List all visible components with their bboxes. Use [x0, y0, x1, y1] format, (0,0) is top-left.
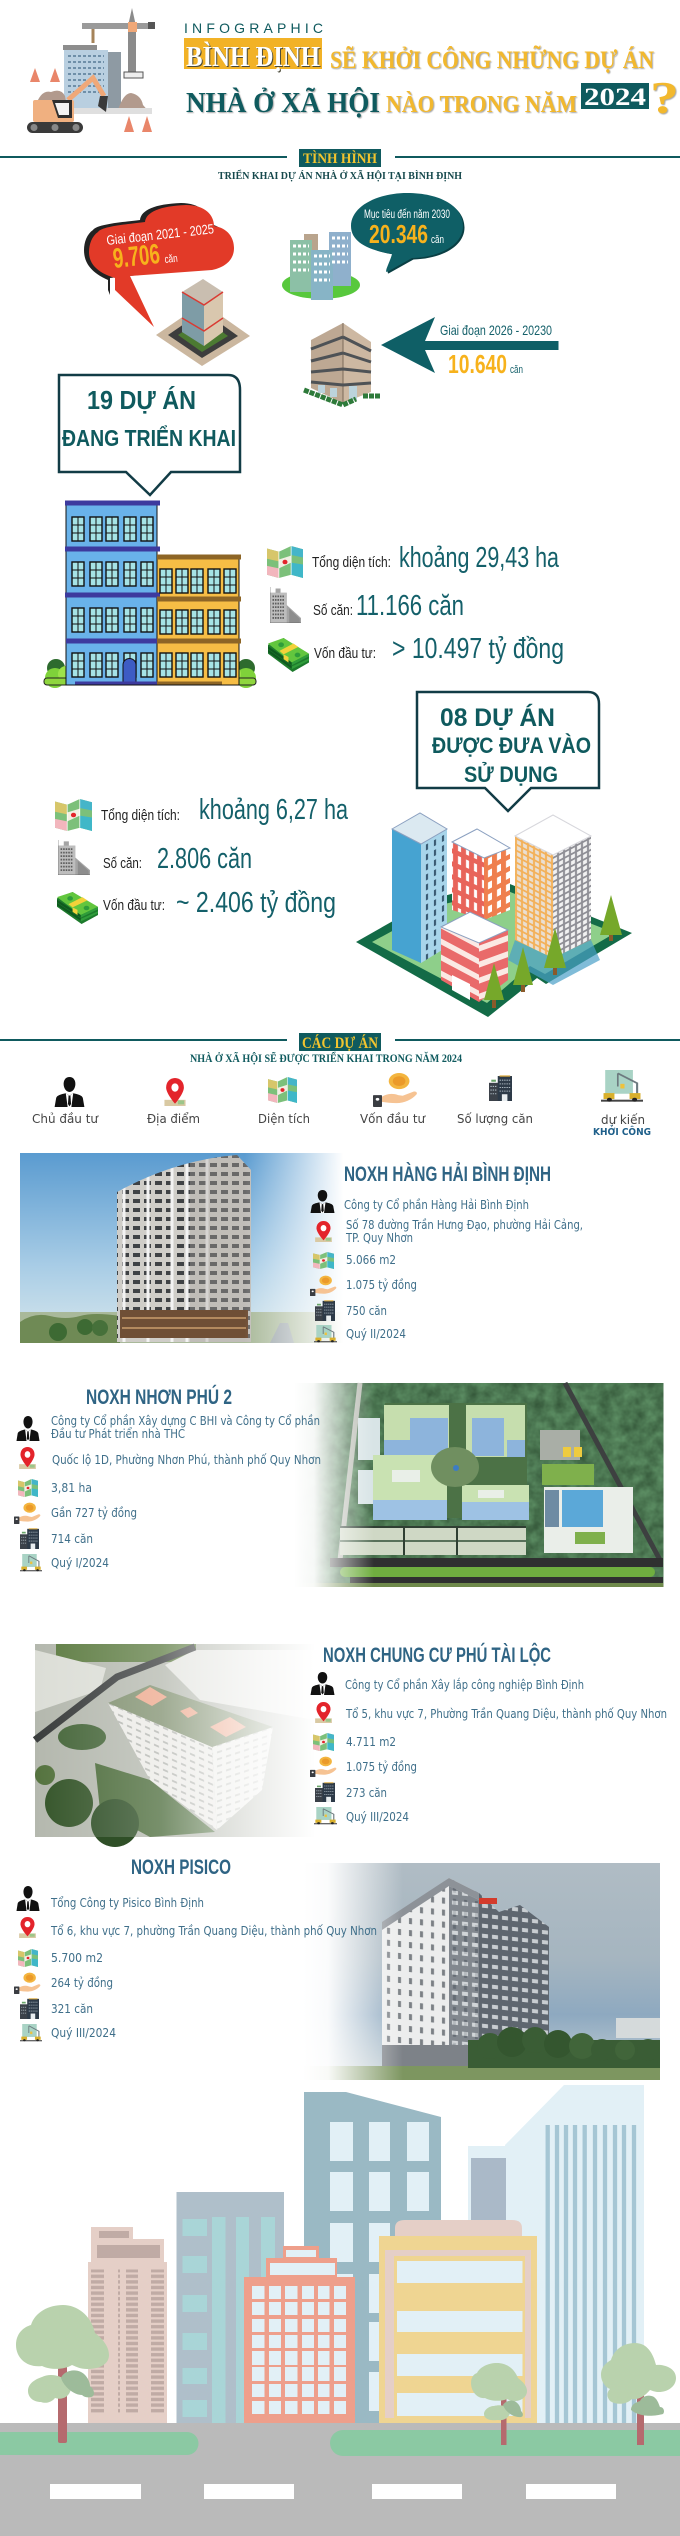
units row	[20, 1529, 93, 1549]
callout: 08 projects in use	[417, 692, 599, 811]
title highlight box: BÌNH ĐỊNH: BÌNH ĐỊNH	[186, 40, 320, 73]
investor row	[16, 1413, 320, 1441]
callout: target by 2030: 20.346	[369, 219, 428, 249]
area row: 4.711 m2	[346, 1734, 396, 1749]
callout: 2021-2025 target: căn	[164, 253, 178, 266]
units row: 750 căn	[346, 1303, 387, 1318]
stat: units: 11.166 căn	[356, 590, 464, 622]
start row	[314, 1807, 409, 1824]
location row: TP. Quy Nhơn	[345, 1230, 413, 1245]
title line 2: NHÀ Ở XÃ HỘI: NHÀ Ở XÃ HỘI	[186, 86, 380, 119]
project info: Pisico	[14, 1856, 377, 2041]
units row: 714 căn	[51, 1531, 93, 1546]
project info: Phú Tài Lộc	[310, 1643, 667, 1824]
location row	[19, 1447, 321, 1469]
project name: NOXH NHƠN PHÚ 2	[86, 1385, 232, 1409]
capital row: 1.075 tỷ đồng	[346, 1277, 417, 1292]
header illustration: construction site	[27, 8, 155, 133]
legend item: expected start: KHỞI CÔNG	[593, 1124, 651, 1138]
stats: 19 projects	[267, 542, 564, 672]
stat: units: 2.806 căn	[157, 843, 252, 875]
capital row: 264 tỷ đồng	[51, 1975, 113, 1990]
building: coral block	[244, 2246, 355, 2423]
stat: units	[313, 590, 464, 622]
stat: units: Số căn:	[313, 602, 353, 619]
kicker: INFOGRAPHIC: INFOGRAPHIC	[184, 20, 323, 36]
stat: investment: ~ 2.406 tỷ đồng	[176, 887, 336, 919]
area row	[313, 1733, 396, 1751]
area row: 5.066 m2	[346, 1252, 396, 1267]
label: 2026-2030 figures: 10.640	[448, 349, 507, 379]
legend item: area: Diện tích	[258, 1112, 310, 1126]
stat: total area: khoảng 29,43 ha	[399, 542, 560, 574]
callout: 19 projects under way: 19 DỰ ÁN	[87, 385, 196, 415]
project info: Hàng Hải Bình Định	[310, 1163, 583, 1342]
project name: NOXH PISICO	[131, 1856, 231, 1879]
label: 2026-2030 figures: Giai đoạn 2026 - 20230	[440, 322, 552, 338]
label: 2026-2030 figures	[440, 322, 552, 379]
units row: 273 căn	[346, 1785, 387, 1800]
project photo: Hàng Hải tower	[20, 1150, 350, 1345]
stat: total area: khoảng 6,27 ha	[199, 794, 349, 826]
callout: 2021-2025 target	[84, 203, 234, 327]
legend: icon key	[32, 1070, 651, 1138]
location row: Tổ 6, khu vực 7, phường Trần Quang Diệu, thành phố Quy Nhơn	[50, 1923, 377, 1938]
tree: right	[601, 2343, 676, 2445]
green verge: left	[0, 2432, 198, 2455]
investor row: Đầu tư Phát triển nhà THC	[51, 1426, 185, 1441]
project photo: Nhơn Phú 2 aerial	[294, 1382, 664, 1588]
callout: 19 projects under way	[59, 375, 240, 495]
icon: isometric office tower	[156, 279, 250, 366]
callout: 08 projects in use: ĐƯỢC ĐƯA VÀO	[432, 733, 591, 758]
legend item: expected start	[593, 1070, 651, 1138]
investor row: Công ty Cổ phần Xây dựng C BHI và Công ty Cổ phần	[51, 1413, 320, 1428]
legend item: investor	[32, 1077, 99, 1126]
road markings	[50, 2484, 616, 2499]
start row: Quý III/2024	[346, 1809, 409, 1824]
legend item: capital	[360, 1073, 426, 1126]
icon: money	[268, 638, 309, 672]
year badge: 2024	[584, 84, 647, 111]
building: pink tower	[88, 2227, 167, 2423]
units row: 321 căn	[51, 2001, 93, 2016]
callout: 08 projects in use: SỬ DỤNG	[464, 762, 558, 787]
start row: Quý III/2024	[51, 2025, 116, 2040]
building: pale skyscraper	[468, 2085, 644, 2423]
location row	[19, 1917, 377, 1938]
location row	[315, 1702, 667, 1723]
area row	[18, 1479, 92, 1497]
callout: target by 2030: căn	[431, 234, 444, 246]
start row	[314, 1325, 406, 1342]
capital row	[14, 1973, 113, 1994]
area row: 5.700 m2	[51, 1950, 103, 1965]
investor row	[16, 1886, 204, 1911]
callout: 2021-2025 target: Giai đoạn 2021 - 2025	[106, 221, 215, 248]
location row: Quốc lộ 1D, Phường Nhơn Phú, thành phố Quy Nhơn	[52, 1452, 321, 1467]
green verge: right	[330, 2430, 680, 2456]
section heading: TÌNH HÌNH: TÌNH HÌNH	[303, 150, 377, 167]
illustration: blue and yellow apartment blocks	[44, 503, 256, 688]
tree: middle	[471, 2363, 527, 2445]
tree: left	[16, 2305, 109, 2443]
area row	[18, 1949, 103, 1967]
legend item: investor: Chủ đầu tư	[32, 1112, 99, 1126]
investor row	[310, 1190, 529, 1213]
project photo: Pisico tower	[303, 1862, 660, 2081]
capital row	[310, 1757, 417, 1777]
project name: NOXH HÀNG HẢI BÌNH ĐỊNH	[344, 1163, 551, 1186]
capital row	[310, 1276, 417, 1296]
capital row: Gần 727 tỷ đồng	[51, 1505, 137, 1520]
stat: total area	[312, 542, 560, 574]
stat: total area: Tổng diện tích:	[101, 807, 180, 824]
illustration: isometric residential blocks	[356, 813, 632, 1017]
units row	[315, 1301, 387, 1321]
investor row: Công ty Cổ phần Hàng Hải Bình Định	[344, 1197, 529, 1212]
area row	[313, 1252, 396, 1269]
location row	[315, 1217, 583, 1245]
stat: units	[103, 843, 252, 875]
legend item: location	[147, 1078, 200, 1126]
icon: map	[55, 799, 92, 831]
investor row: Công ty Cổ phần Xây lắp công nghiệp Bình Định	[345, 1677, 584, 1692]
investor row: Tổng Công ty Pisico Bình Định	[50, 1895, 204, 1910]
stat: investment	[103, 887, 336, 919]
road	[0, 2423, 680, 2536]
building: yellow block	[379, 2220, 537, 2423]
icon: green-base apartment cluster	[282, 232, 360, 300]
section subheading: TRIỂN KHAI DỰ ÁN NHÀ Ở XÃ HỘI TẠI BÌNH ĐỊNH	[218, 169, 462, 182]
callout: 19 projects under way: ĐANG TRIỂN KHAI	[62, 424, 236, 451]
location row: Số 78 đường Trần Hưng Đạo, phường Hải Cảng,	[346, 1217, 583, 1232]
project photo: Phú Tài Lộc tower	[35, 1644, 315, 1847]
legend item: capital: Vốn đầu tư	[360, 1112, 426, 1126]
investor row	[310, 1672, 584, 1695]
section heading: CÁC DỰ ÁN: CÁC DỰ ÁN	[302, 1033, 378, 1052]
label: 2026-2030 figures: căn	[510, 364, 523, 376]
start row	[20, 1554, 109, 1571]
capital row: 1.075 tỷ đồng	[346, 1759, 417, 1774]
icon: money	[57, 892, 98, 924]
callout: 2021-2025 target: 9.706	[111, 238, 161, 274]
legend item: expected start: dự kiến	[601, 1113, 645, 1127]
footer illustration: city street	[0, 2085, 680, 2536]
icon: building	[270, 587, 301, 623]
building: teal tower	[304, 2092, 441, 2423]
stat: investment	[314, 633, 564, 665]
legend item: units: Số lượng căn	[457, 1112, 533, 1126]
units row	[20, 1999, 93, 2019]
stat: total area: Tổng diện tích:	[312, 554, 391, 571]
callout: 08 projects in use: 08 DỰ ÁN	[440, 703, 555, 732]
project name: NOXH CHUNG CƯ PHÚ TÀI LỘC	[323, 1643, 551, 1667]
title block	[184, 20, 679, 123]
stat: investment: Vốn đầu tư:	[314, 645, 376, 662]
icon: brown apartment building	[304, 323, 381, 405]
start row: Quý II/2024	[346, 1326, 406, 1341]
callout: target by 2030: Mục tiêu đến năm 2030	[364, 209, 450, 221]
question mark: ?	[650, 72, 679, 123]
start row: Quý I/2024	[51, 1555, 109, 1570]
start row	[20, 2024, 116, 2041]
callout: target by 2030	[351, 193, 464, 274]
legend item: area	[258, 1077, 310, 1126]
project info: Nhơn Phú 2	[14, 1385, 321, 1571]
stat: investment: > 10.497 tỷ đồng	[392, 633, 564, 665]
icon: map	[267, 546, 303, 578]
stat: units: Số căn:	[103, 855, 142, 872]
arrow: 2026-2030	[381, 317, 558, 373]
title line 2: NÀO TRONG NĂM: NÀO TRONG NĂM	[386, 91, 577, 118]
legend item: location: Địa điểm	[147, 1112, 200, 1126]
legend item: units	[457, 1076, 533, 1126]
capital row	[14, 1503, 137, 1524]
section subheading: NHÀ Ở XÃ HỘI SẼ ĐƯỢC TRIỂN KHAI TRONG NĂM 2024	[190, 1050, 462, 1065]
area row: 3,81 ha	[51, 1480, 92, 1495]
building: grey-blue block	[176, 2192, 284, 2423]
stat: investment: Vốn đầu tư:	[103, 897, 165, 914]
stat: total area	[101, 794, 349, 826]
icon: building	[58, 840, 90, 875]
stats: 08 projects	[55, 794, 349, 924]
units row	[315, 1783, 387, 1802]
